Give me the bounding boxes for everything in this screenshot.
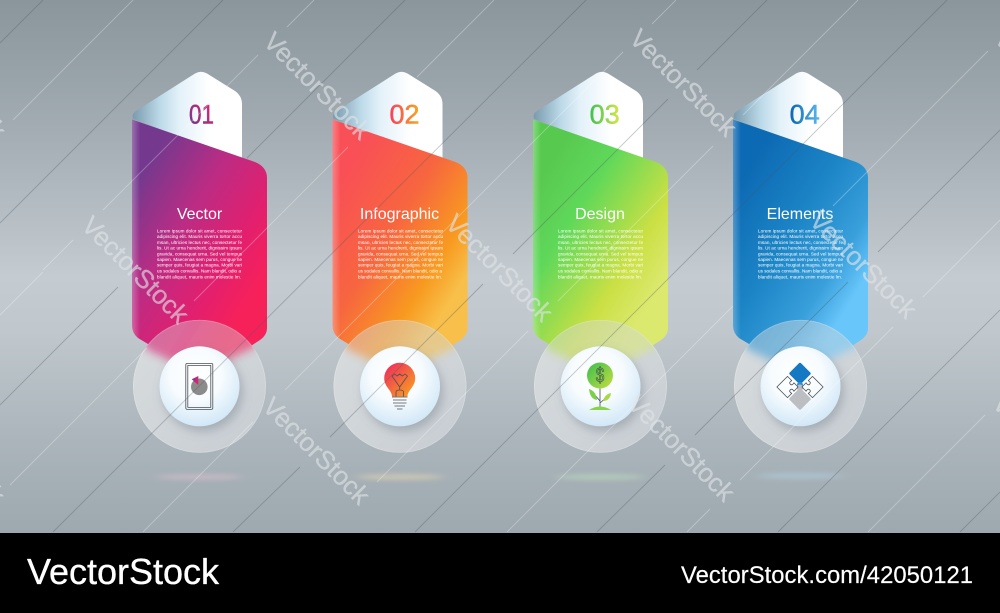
text block: blandit aliquet, mauris enim molestie lm.	[157, 274, 241, 279]
text block: Lorem ipsum dolor sit amet, consectetur	[758, 228, 843, 233]
text block: adipiscing elit. Mauris viverra tortor accu	[758, 234, 843, 239]
heading: Infographic: Infographic	[360, 206, 439, 223]
text block: gravida, consequat urna. Sed vel tempus	[758, 251, 844, 256]
text block	[157, 228, 243, 279]
panel: card 04 Elements	[733, 72, 868, 453]
number tab 03: 03	[590, 100, 620, 130]
text block: blandit aliquet, mauris enim molestie lm.	[558, 274, 642, 279]
heading: Elements: Elements	[767, 206, 833, 223]
text block: lis. Ut ac urna hendrerit, dignissim ipsum	[758, 246, 843, 251]
text block: sapien. Maecenas sem purus, congue ne	[758, 257, 843, 262]
coloured body	[132, 120, 267, 380]
text block: semper quis, feugiat a magna. Morbi vari	[558, 263, 643, 268]
heading: Design: Design	[575, 206, 625, 223]
footer image id: VectorStock.com/42050121	[681, 562, 973, 589]
ground glow: card 4	[756, 473, 844, 479]
text block: us sodales convallis. Nam blandit, odio a	[758, 269, 842, 274]
number tab 01	[133, 72, 242, 160]
number tab 03	[534, 72, 643, 160]
watermark: VectorStock repeats: VectorStock	[440, 208, 560, 328]
icon: phone with pie chart	[186, 363, 213, 409]
inner circle	[560, 346, 640, 426]
text block: blandit aliquet, mauris enim molestie lm.	[758, 274, 842, 279]
text block: sapien. Maecenas sem purus, congue ne	[157, 257, 242, 262]
text block: sapien. Maecenas sem purus, congue ne	[558, 257, 643, 262]
coloured body	[533, 120, 668, 380]
number tab 04	[734, 72, 843, 160]
text block: semper quis, feugiat a magna. Morbi vari	[758, 263, 843, 268]
puzzle piece: top blue	[787, 362, 813, 389]
icon: money plant: $	[596, 364, 604, 387]
inner circle	[360, 346, 440, 426]
inner circle	[760, 346, 840, 426]
footer logo text: VectorStock	[27, 551, 220, 592]
text block: adipiscing elit. Mauris viverra tortor accu	[157, 234, 242, 239]
text block: Lorem ipsum dolor sit amet, consectetur	[558, 228, 643, 233]
coloured body	[332, 120, 468, 380]
inner circle	[160, 346, 240, 426]
text block: us sodales convallis. Nam blandit, odio a	[157, 269, 241, 274]
ground glow: card 1	[155, 474, 243, 480]
ground glow: card 3	[556, 474, 644, 480]
watermark: VectorStock repeats	[0, 23, 1000, 511]
text block	[358, 228, 444, 279]
text block: semper quis, feugiat a magna. Morbi vari	[157, 263, 242, 268]
watermark: VectorStock repeats: VectorStock	[624, 23, 744, 143]
text block	[758, 228, 844, 279]
text block: adipiscing elit. Mauris viverra tortor accu	[558, 234, 643, 239]
number tab 01: 01	[189, 100, 214, 130]
text block: sapien. Maecenas sem purus, congue ne	[358, 257, 443, 262]
glass ring	[734, 320, 867, 453]
number tab 02: 02	[389, 100, 420, 130]
text block: msan, ultricies lectus nec, consectetur fe	[558, 240, 643, 245]
watermark: VectorStock repeats: VectorStock	[622, 388, 742, 508]
watermark: VectorStock repeats: VectorStock	[76, 210, 196, 330]
text block: lis. Ut ac urna hendrerit, dignissim ipsum	[358, 246, 443, 251]
text block: Lorem ipsum dolor sit amet, consectetur	[358, 228, 443, 233]
ground glow: card 2	[356, 474, 444, 480]
watermark: VectorStock repeats: VectorStock	[257, 391, 377, 511]
text block: msan, ultricies lectus nec, consectetur fe	[758, 240, 843, 245]
puzzle piece: right outline	[802, 376, 823, 398]
footer band	[0, 533, 1000, 613]
text block: gravida, consequat urna. Sed vel tempus	[358, 251, 444, 256]
heading: Vector: Vector	[177, 206, 223, 223]
icon: puzzle pieces	[777, 362, 823, 410]
text block: gravida, consequat urna. Sed vel tempus	[558, 251, 644, 256]
panel: card 03 Design	[533, 72, 668, 453]
text block: Lorem ipsum dolor sit amet, consectetur	[157, 228, 242, 233]
text block: msan, ultricies lectus nec, consectetur fe	[358, 240, 443, 245]
text block: gravida, consequat urna. Sed vel tempus	[157, 251, 243, 256]
glass ring	[334, 320, 466, 453]
text block: adipiscing elit. Mauris viverra tortor accu	[358, 234, 443, 239]
text block: lis. Ut ac urna hendrerit, dignissim ipsum	[558, 246, 643, 251]
icon: light bulb	[384, 363, 415, 409]
text block: lis. Ut ac urna hendrerit, dignissim ipsum	[157, 246, 242, 251]
text block: semper quis, feugiat a magna. Morbi vari	[358, 263, 443, 268]
coloured body	[733, 120, 868, 380]
number tab 04: 04	[790, 100, 820, 130]
icon: money plant	[587, 362, 613, 410]
glass ring	[534, 320, 667, 453]
text block: us sodales convallis. Nam blandit, odio a	[558, 269, 642, 274]
text block	[558, 228, 644, 279]
text block: blandit aliquet, mauris enim molestie lm.	[358, 274, 442, 279]
panel: card 01 Vector	[132, 72, 267, 453]
puzzle piece: left outline	[777, 376, 798, 398]
text block: us sodales convallis. Nam blandit, odio a	[358, 269, 442, 274]
number tab 02	[333, 72, 442, 160]
puzzle piece: bottom grey	[786, 383, 814, 410]
text block: msan, ultricies lectus nec, consectetur fe	[157, 240, 242, 245]
watermark: VectorStock repeats: VectorStock	[258, 26, 378, 146]
panel: card 02 Infographic	[332, 72, 468, 453]
watermark: VectorStock repeats: VectorStock	[804, 205, 924, 325]
glass ring	[133, 320, 266, 453]
